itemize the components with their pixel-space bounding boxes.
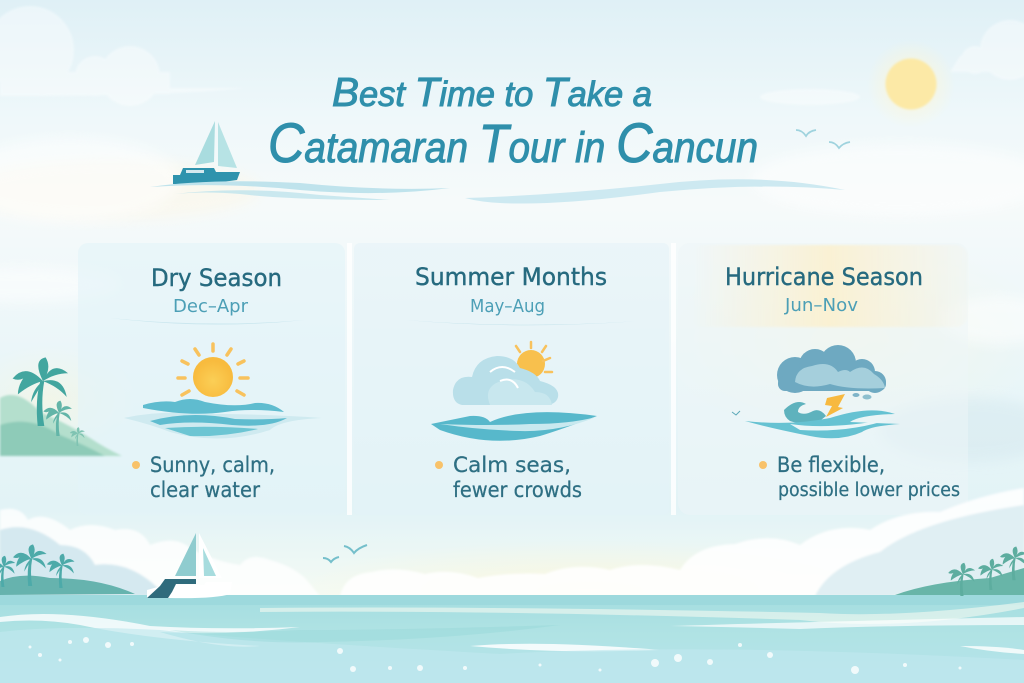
heading: dry season: Dry Season [151, 264, 282, 292]
heading: hurricane season: Jun–Nov [784, 295, 858, 316]
heading: dry season: Dec–Apr [173, 296, 249, 317]
heading: dry season [151, 264, 282, 317]
bullet text: dry season: Sunny, calm, [150, 453, 275, 477]
bullet text: summer months: fewer crowds [453, 478, 582, 502]
title: Catamaran Tour in Cancun [268, 111, 758, 174]
icon: sun in sky [867, 40, 955, 128]
panel: hurricane season [678, 243, 968, 515]
heading: hurricane season [725, 263, 923, 316]
panel: summer months [354, 243, 669, 515]
icon: title sailboat [173, 121, 240, 184]
icon: storm cloud, lightning and waves [732, 345, 900, 438]
heading: summer months: Summer Months [415, 263, 607, 291]
panel: dry season [78, 243, 345, 515]
heading: summer months [415, 263, 607, 317]
clouds top right [760, 20, 1024, 105]
title [268, 69, 758, 174]
bullet text: dry season: clear water [150, 478, 260, 502]
icon: lower left palms [0, 544, 135, 595]
icon: title birds [796, 130, 850, 148]
bullet text: dry season [132, 453, 275, 502]
title: Best Time to Take a [332, 69, 652, 115]
sea [0, 595, 1024, 683]
clouds top left [0, 6, 245, 106]
bullet text: summer months: Calm seas, [453, 453, 571, 477]
bullet text: hurricane season: Be flexible, [777, 453, 885, 477]
title wave flourish [150, 179, 845, 204]
bullet text: hurricane season: possible lower prices [778, 480, 960, 501]
bullet text: summer months [435, 453, 582, 502]
island: left with palms [0, 357, 122, 456]
icon: sun over waves [110, 318, 322, 439]
icon: lower right palms [895, 546, 1024, 596]
divider [347, 243, 676, 515]
bullet text: hurricane season [759, 453, 960, 501]
icon: lower sailboat [147, 533, 232, 598]
heading: summer months: May–Aug [470, 296, 545, 317]
heading: hurricane season: Hurricane Season [725, 263, 923, 291]
icon: lower birds [323, 545, 367, 562]
clouds lower left [0, 509, 320, 596]
icon: cloud, sun and waves [405, 320, 640, 441]
clouds lower right [340, 488, 1024, 596]
